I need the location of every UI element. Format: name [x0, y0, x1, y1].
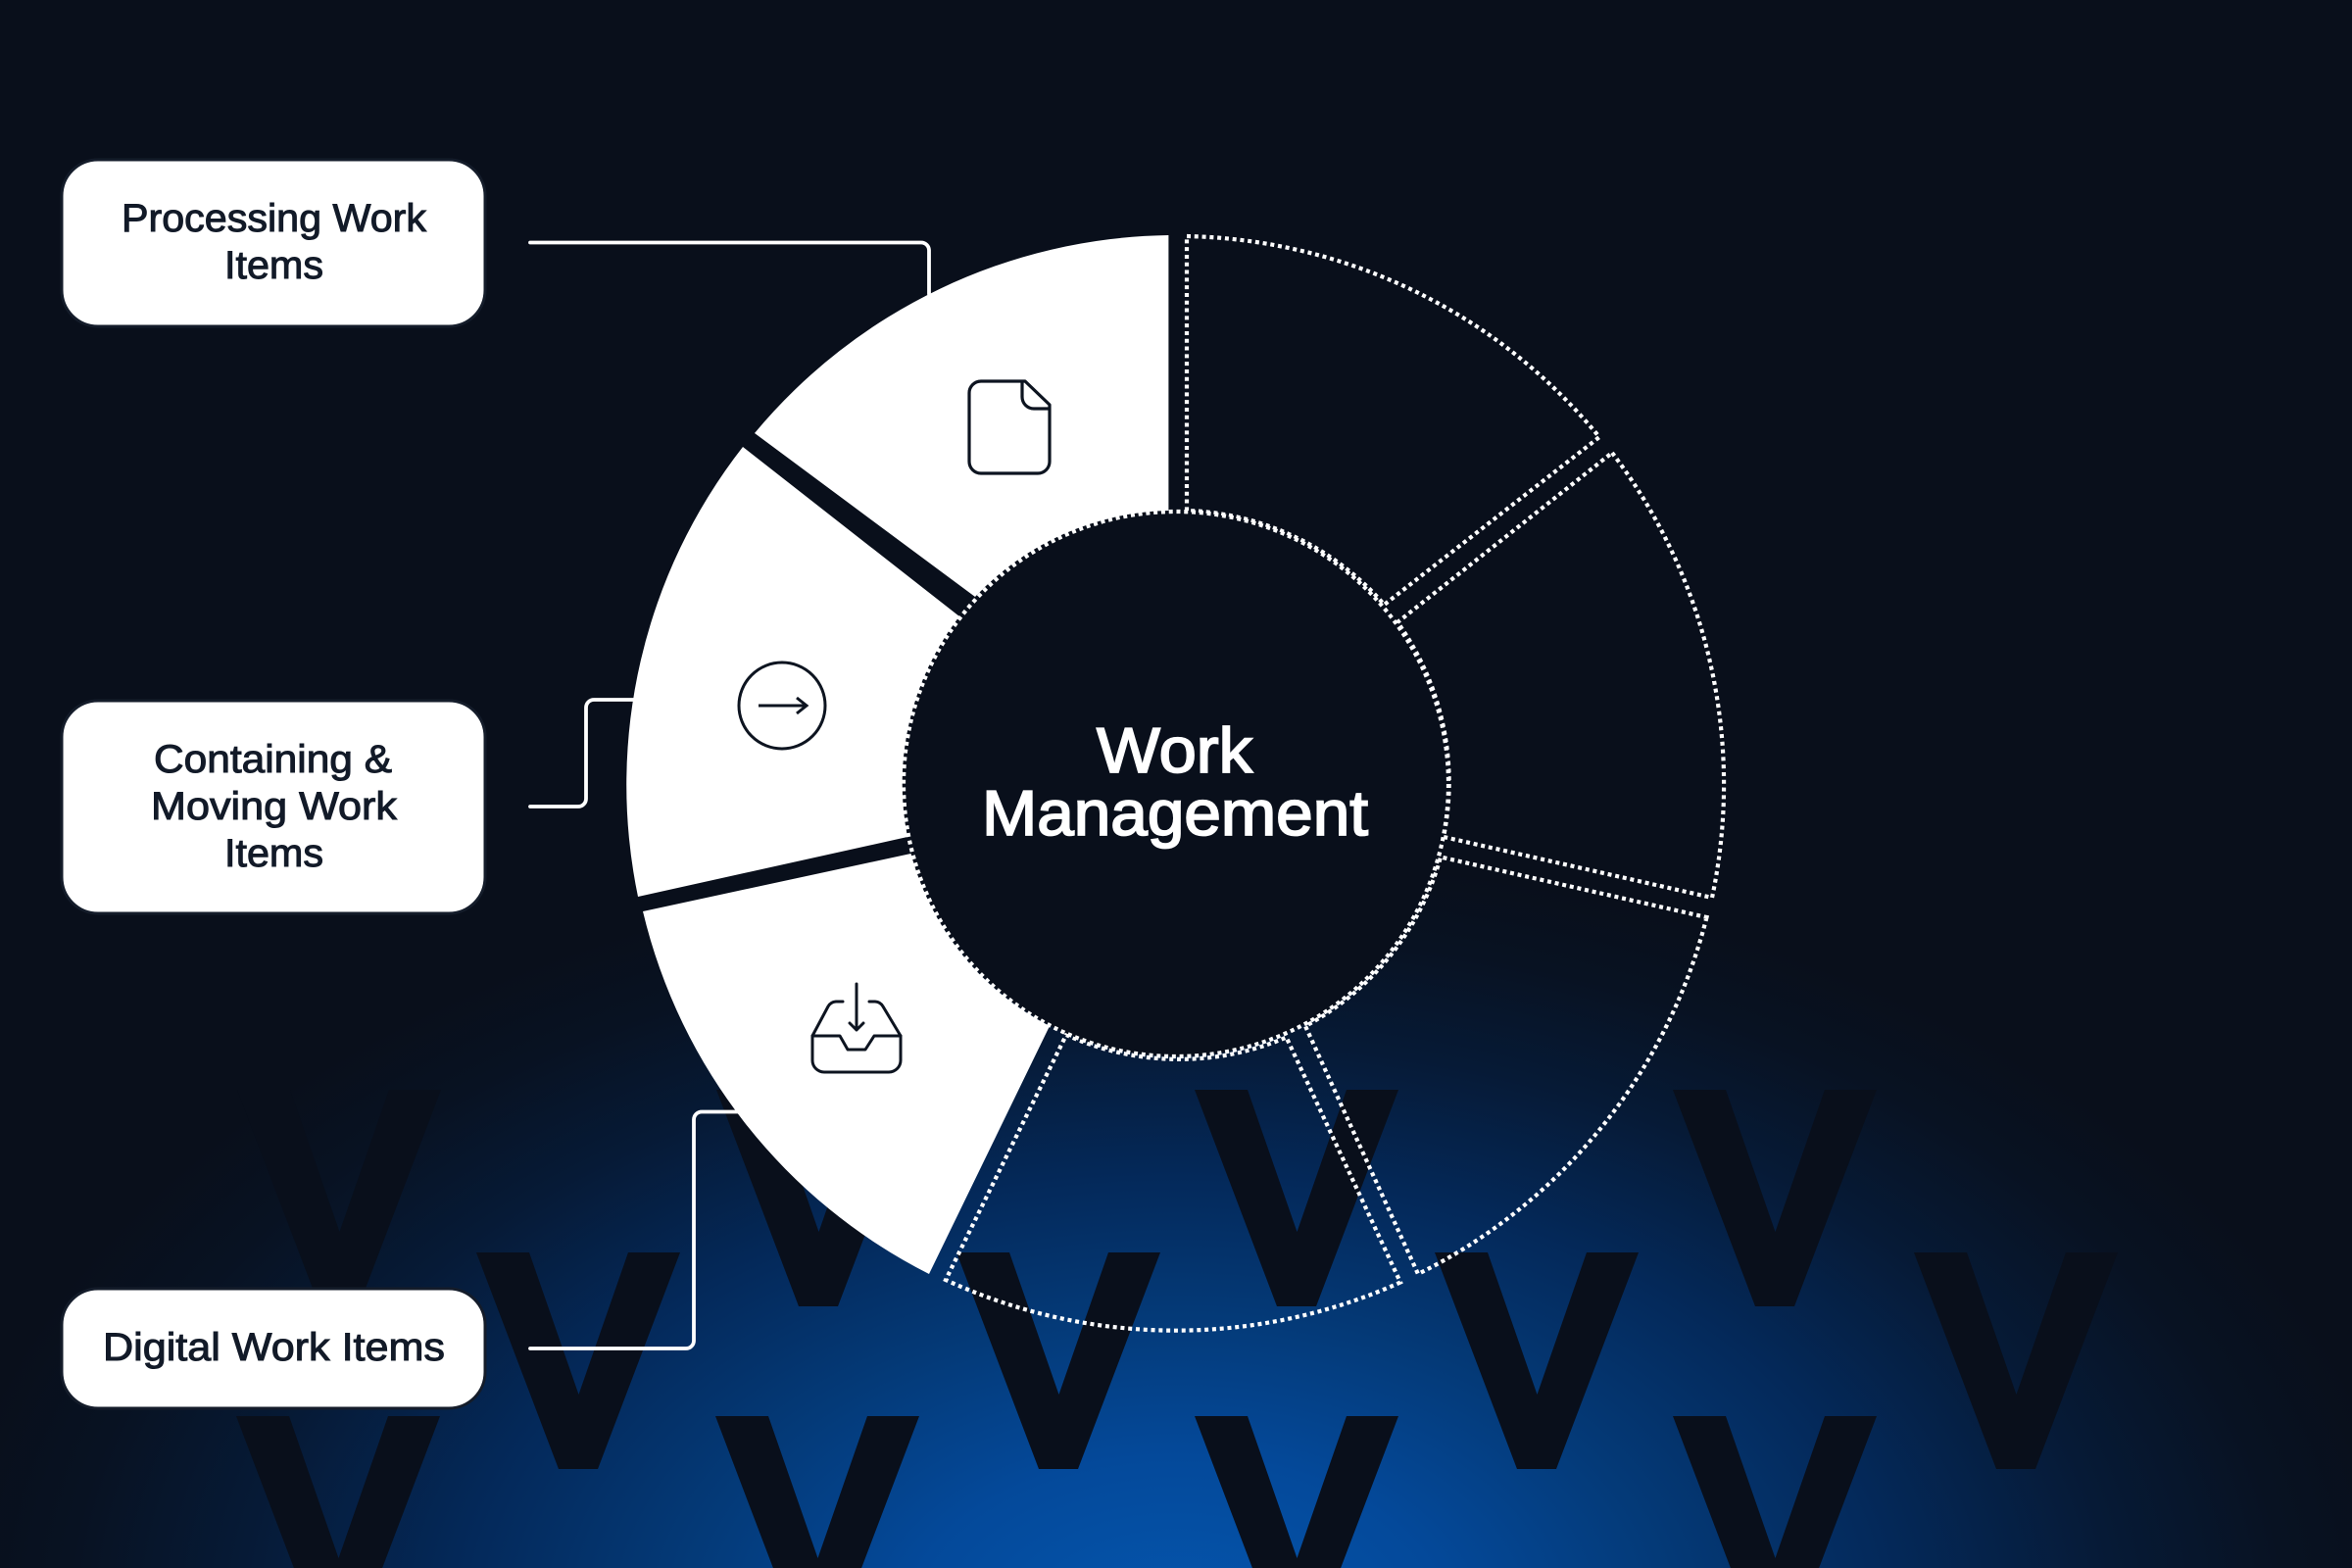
center title: Work — [1097, 714, 1253, 786]
center title — [982, 714, 1368, 849]
label: Processing Work Items: Items — [224, 244, 323, 287]
label: Digital Work Items: Digital Work Items — [103, 1326, 445, 1369]
wheel: white segment, processing — [755, 235, 1168, 597]
connector: Containing and Moving Work Items — [530, 700, 637, 807]
center hub circle — [904, 512, 1448, 1056]
label: Processing Work Items: Processing Work — [122, 197, 427, 240]
wheel: white segment, containing and moving — [626, 447, 959, 897]
wheel: white segment, digital items — [643, 854, 1050, 1274]
label: Containing and Moving Work Items: Containing & — [154, 738, 392, 781]
icon: arrow in circle — [739, 662, 825, 749]
icon: document — [969, 381, 1050, 473]
wheel: dotted empty segments — [946, 236, 1724, 1331]
connector: Processing Work Items — [530, 243, 929, 294]
background pattern: V letters — [236, 1090, 2118, 1568]
label: Processing Work Items — [62, 160, 485, 326]
label: Containing and Moving Work Items: Items — [224, 832, 323, 875]
icon: inbox tray with arrow — [812, 984, 901, 1072]
label: Digital Work Items — [62, 1289, 485, 1408]
label: Containing and Moving Work Items — [62, 701, 485, 913]
center title: Management — [982, 777, 1368, 849]
label: Containing and Moving Work Items: Moving Work — [151, 785, 398, 828]
connector: Digital Work Items — [530, 1111, 741, 1348]
